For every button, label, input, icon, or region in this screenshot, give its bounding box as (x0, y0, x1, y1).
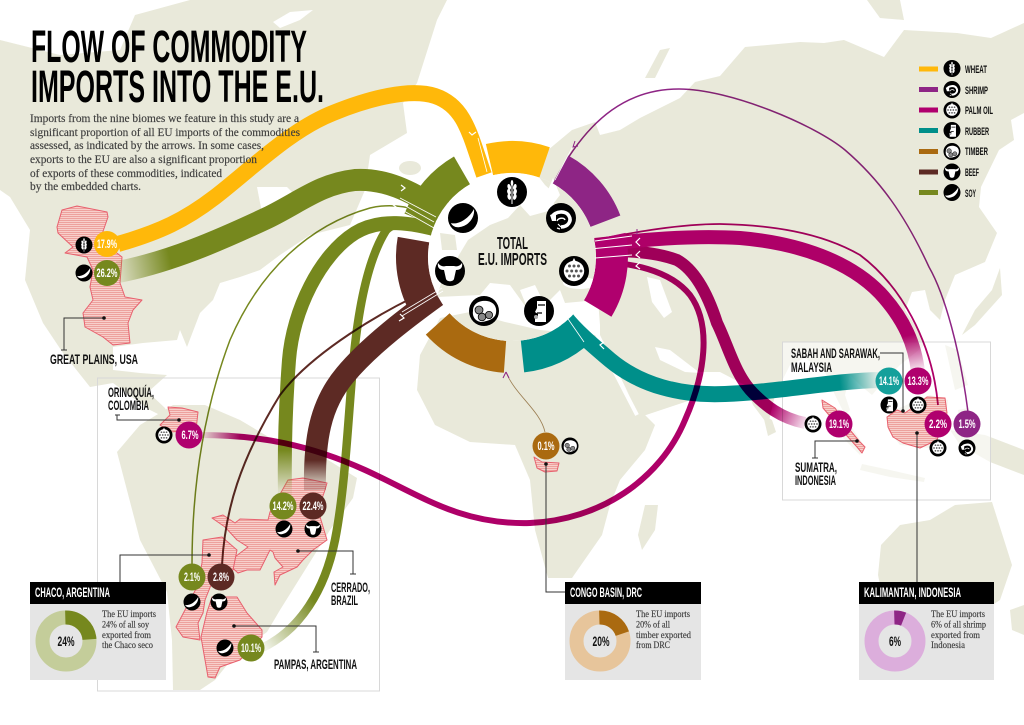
hub title (478, 233, 547, 269)
bubble: palm 6.7% Orinoquia (156, 422, 202, 448)
panel: Congo Basin, DRC: CONGO BASIN, DRC (570, 584, 642, 600)
legend: timber: TIMBER (965, 146, 988, 158)
panel text: 24% of all soy (102, 620, 149, 630)
hub icon: rubber (524, 296, 554, 326)
legend: timber (919, 143, 988, 160)
legend: SOY (965, 188, 976, 200)
region: Congo Basin (534, 457, 559, 472)
flow: rubber from Sabah (565, 317, 880, 394)
bubble: rubber 14.1% Sabah: 14.1% (879, 374, 899, 388)
legend (919, 60, 993, 201)
label: Cerrado: CERRADO, (331, 579, 370, 595)
flow: wheat from Great Plains (118, 93, 484, 244)
flow: beef from Chaco (222, 283, 445, 565)
segment: beef (412, 240, 429, 313)
panel text: exported from (931, 630, 980, 640)
panel: Chaco, Argentina: CHACO, ARGENTINA (35, 584, 110, 600)
bubble: wheat 17.9% Great Plains (76, 231, 120, 257)
panel text: 6% of all shrimp (931, 620, 986, 630)
hub icon: wheat (497, 177, 527, 207)
donut chart 24%: 24% (58, 633, 75, 649)
label: Great Plains: GREAT PLAINS, USA (50, 351, 138, 367)
hub icon: shrimp (546, 203, 576, 233)
hub icon: beef (435, 256, 465, 286)
flow: soy from Cerrado (285, 223, 445, 495)
region labels (50, 345, 880, 672)
data bubbles (76, 231, 980, 662)
flow: palm oil from Sabah (595, 237, 918, 372)
region: Sumatra (822, 400, 865, 453)
bubble: palm 6.7% Orinoquia: 6.7% (182, 428, 199, 442)
panel text (931, 609, 986, 650)
panel text (102, 609, 156, 650)
legend: palm oil: PALM OIL (965, 105, 993, 117)
donut chart 6%: 6% (889, 633, 901, 649)
panel: Kalimantan, Indonesia (859, 582, 994, 680)
legend: rubber: RUBBER (965, 126, 989, 138)
legend: wheat: WHEAT (965, 64, 987, 76)
arrow tips (503, 141, 637, 378)
bubble: soy 26.2% Great Plains (76, 260, 120, 286)
donut chart 20%: 20% (592, 633, 610, 649)
bubble: soy 2.1% Chaco (178, 564, 206, 610)
segment: shrimp (560, 170, 605, 221)
panel text: exported from (102, 630, 151, 640)
bubble: palm 19.1% Sumatra: 19.1% (829, 417, 849, 431)
bubble: shrimp 1.5% Kalimantan: 1.5% (958, 417, 976, 431)
flow: soy from Chaco (192, 206, 445, 565)
flow: soy from Pampas (262, 224, 447, 648)
bubble: beef 22.4% Cerrado (300, 492, 326, 538)
flow: shrimp from Kalimantan (555, 89, 968, 412)
bubble: palm 2.2% Kalimantan: 2.2% (929, 417, 947, 431)
biome regions (57, 206, 947, 678)
label: Cerrado: BRAZIL (331, 592, 358, 608)
region: Orinoquia (160, 407, 198, 432)
inset box: South America (98, 378, 380, 691)
legend: wheat (919, 60, 987, 77)
flow: palm oil from Orinoquia (200, 262, 704, 523)
label: Cerrado (331, 579, 370, 608)
panel text: The EU imports (102, 609, 156, 619)
hub icon: timber (469, 296, 499, 326)
legend: BEEF (965, 167, 979, 179)
region: Pampas (201, 597, 262, 678)
bubble: soy 14.2% Cerrado: 14.2% (272, 499, 294, 513)
bubble: wheat 17.9% Great Plains: 17.9% (97, 237, 117, 251)
region: Kalimantan and Sabah (887, 397, 947, 448)
title: FLOW OF COMMODITY (31, 21, 307, 72)
label: Sumatra: SUMATRA, (795, 459, 837, 475)
flow: beef from Cerrado (315, 290, 445, 490)
arrow chevrons (392, 132, 640, 349)
hub disc (428, 173, 596, 341)
hub icon: palm oil (559, 256, 589, 286)
bubble: soy 26.2% Great Plains: 26.2% (96, 266, 118, 280)
intro text: assessed, as indicated by the arrows. In some cases, (30, 140, 264, 152)
panel text: 20% of all (636, 620, 670, 630)
bubble: beef 22.4% Cerrado: 22.4% (302, 499, 324, 513)
intro text (30, 113, 301, 193)
panel text: Indonesia (931, 640, 965, 650)
hub (396, 140, 628, 373)
segment: soy (419, 170, 462, 220)
bubble: rubber 14.1% Sabah (876, 368, 902, 414)
bubble: palm 2.2% Kalimantan (924, 410, 952, 456)
panel text: The EU imports (636, 609, 690, 619)
intro text: by the embedded charts. (30, 181, 141, 193)
legend: rubber (919, 122, 989, 139)
legend: beef (919, 164, 979, 180)
bubble: beef 2.8% Chaco (208, 564, 234, 610)
flow: timber from Congo (506, 372, 545, 432)
bubble: soy 2.1% Chaco: 2.1% (184, 570, 200, 584)
region: Cerrado (212, 478, 327, 585)
flow: palm oil from Sumatra (595, 251, 805, 423)
flow: soy from Great Plains (118, 180, 445, 272)
legend: shrimp: SHRIMP (965, 85, 988, 97)
bubble: timber 0.1% Congo: 0.1% (538, 439, 555, 453)
label: Pampas: PAMPAS, ARGENTINA (274, 656, 357, 672)
label: Orinoquia (108, 384, 154, 413)
label: Sabah and Sarawak (791, 345, 880, 375)
bubble: timber 0.1% Congo (532, 432, 578, 460)
panel text: The EU imports (931, 609, 985, 619)
legend: soy (919, 184, 976, 201)
bubble: soy 14.2% Cerrado (270, 492, 296, 538)
flow seams and chevrons (392, 132, 640, 378)
label: Sabah and Sarawak: SABAH AND SARAWAK, (791, 345, 880, 361)
panel: Chaco, Argentina (30, 582, 166, 680)
intro text: of exports of these commodities, indicated (30, 168, 222, 180)
segment: wheat (490, 157, 545, 162)
hub icon: soy (448, 203, 478, 233)
bubble: soy 10.1% Pampas (216, 634, 264, 662)
region: Chaco (176, 537, 237, 640)
hub title: TOTAL (497, 233, 528, 253)
panel text: from DRC (636, 640, 670, 650)
label: Orinoquia: ORINOQUÍA, (108, 384, 154, 400)
title (31, 21, 324, 112)
segment: rubber (522, 330, 580, 356)
panel text: timber exported (636, 630, 691, 640)
panel text: the Chaco seco (102, 640, 153, 650)
legend: shrimp (919, 81, 988, 98)
title: IMPORTS INTO THE E.U. (31, 61, 324, 112)
label: Sabah and Sarawak: MALAYSIA (791, 359, 832, 375)
bubble: palm 19.1% Sumatra (804, 410, 852, 438)
inset box: South-East Asia (782, 342, 990, 500)
bubble: palm 13.3% Sabah (904, 368, 932, 414)
bubble: shrimp 1.5% Kalimantan (954, 410, 980, 456)
legend: palm oil (919, 102, 993, 118)
bubble: beef 2.8% Chaco: 2.8% (213, 570, 229, 584)
segment: timber (438, 324, 505, 357)
segment: palm oil (598, 236, 612, 308)
intro text: Imports from the nine biomes we feature in this study are a (30, 113, 299, 125)
flow: palm oil from Kalimantan (595, 224, 938, 405)
panel text (636, 609, 691, 650)
intro text: significant proportion of all EU imports of the commodities (30, 127, 301, 139)
region: Great Plains (57, 206, 142, 345)
intro text: exports to the EU are also a significant proportion (30, 154, 257, 166)
label: Orinoquia: COLOMBIA (108, 397, 149, 413)
panel: Congo Basin, DRC (565, 582, 701, 680)
leader lines (61, 316, 919, 652)
label: Sumatra: INDONESIA (795, 472, 836, 488)
label: Sumatra (795, 459, 837, 488)
bubble: soy 10.1% Pampas: 10.1% (241, 641, 261, 655)
hub title: E.U. IMPORTS (478, 249, 547, 269)
bubble: palm 13.3% Sabah: 13.3% (908, 374, 929, 388)
flow arrows (118, 89, 968, 648)
